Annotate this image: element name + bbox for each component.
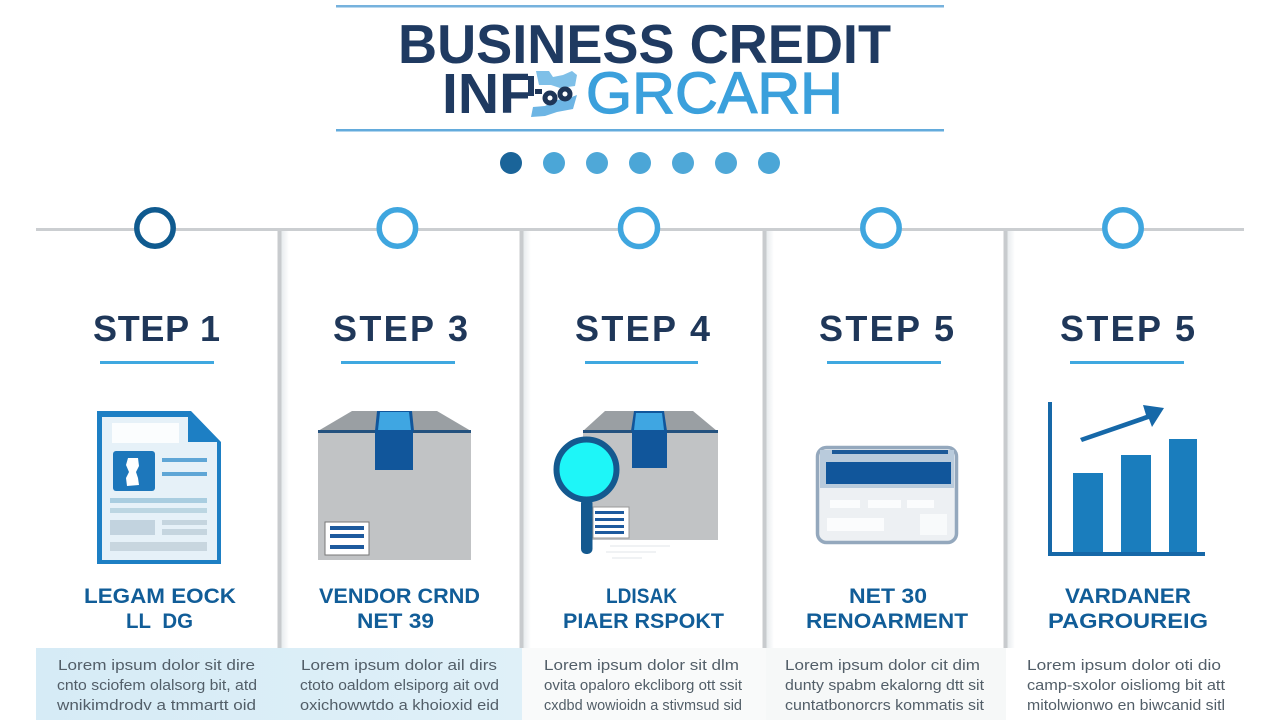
step description: [1027, 658, 1225, 714]
step heading: STEP 3: [333, 308, 468, 349]
step description: cnto sciofem olalsorg bit, atd: [57, 678, 257, 694]
step description: [544, 658, 742, 714]
timeline: [36, 210, 1244, 246]
icon: package: [318, 411, 471, 560]
panel: step 5: [1027, 308, 1225, 714]
icon: title emblem: [528, 68, 580, 118]
step title: VARDANER: [1065, 585, 1191, 608]
step description: Lorem ipsum dolor oti dio: [1027, 658, 1221, 674]
step title: LDISAK: [606, 585, 677, 608]
text band backgrounds: [36, 648, 1006, 720]
step heading: STEP 4: [575, 308, 710, 349]
step description: Lorem ipsum dolor sit dlm: [544, 658, 739, 674]
panel: step 4: [785, 308, 984, 714]
step description: [785, 658, 984, 714]
step description: dunty spabm ekalorng dtt sit: [785, 678, 984, 694]
step title: NET 39: [357, 610, 434, 633]
step title: [319, 585, 480, 633]
step description: Lorem ipsum dolor ail dirs: [301, 658, 497, 674]
panel: step 3: [544, 308, 742, 714]
step title: LL DG: [126, 610, 193, 633]
step title: VENDOR CRND: [319, 585, 480, 608]
icon: credit card: [818, 448, 956, 542]
step title: RENOARMENT: [806, 610, 968, 633]
icon: bar chart with arrow: [1048, 402, 1205, 556]
step title: PIAER RSPOKT: [563, 610, 724, 633]
step title: LEGAM EOCK: [84, 585, 236, 608]
step heading: STEP 1: [93, 308, 220, 349]
step title: [1048, 585, 1208, 633]
panel: step 2: [300, 308, 499, 714]
step description: cxdbd wowioidn a stivmsud sid: [544, 698, 742, 714]
step description: ovita opaloro ekcliborg ott ssit: [544, 678, 742, 694]
column dividers: [278, 231, 1015, 648]
step description: [300, 658, 499, 714]
title line 1: BUSINESS CREDIT: [398, 13, 891, 75]
step description: cuntatbonorcrs kommatis sit: [785, 698, 984, 714]
panel: step 1: [56, 308, 257, 714]
step title: [563, 585, 724, 633]
step description: Lorem ipsum dolor cit dim: [785, 658, 980, 674]
step heading: STEP 5: [1060, 308, 1195, 349]
icon: package with magnifier: [556, 411, 718, 558]
step title: [84, 585, 236, 633]
step description: Lorem ipsum dolor sit dire: [58, 658, 255, 674]
title line 2 blue: GRCARH: [586, 61, 843, 126]
step description: wnikimdrodv a tmmartt oid: [56, 698, 256, 714]
step description: [56, 658, 257, 714]
icon: document: [97, 411, 221, 564]
step description: mitolwionwo en biwcanid sitl: [1027, 698, 1225, 714]
step description: ctoto oaldom elsiporg ait ovd: [300, 678, 499, 694]
step title: PAGROUREIG: [1048, 610, 1208, 633]
title line 2 dark: INF: [442, 62, 534, 126]
title block: [336, 5, 944, 132]
pagination dots: [500, 152, 780, 174]
step description: oxichowwtdo a khoioxid eid: [300, 698, 499, 714]
step title: NET 30: [849, 585, 927, 608]
step title: [806, 585, 968, 633]
step heading: STEP 5: [819, 308, 954, 349]
step description: camp-sxolor oisliomg bit att: [1027, 678, 1225, 694]
